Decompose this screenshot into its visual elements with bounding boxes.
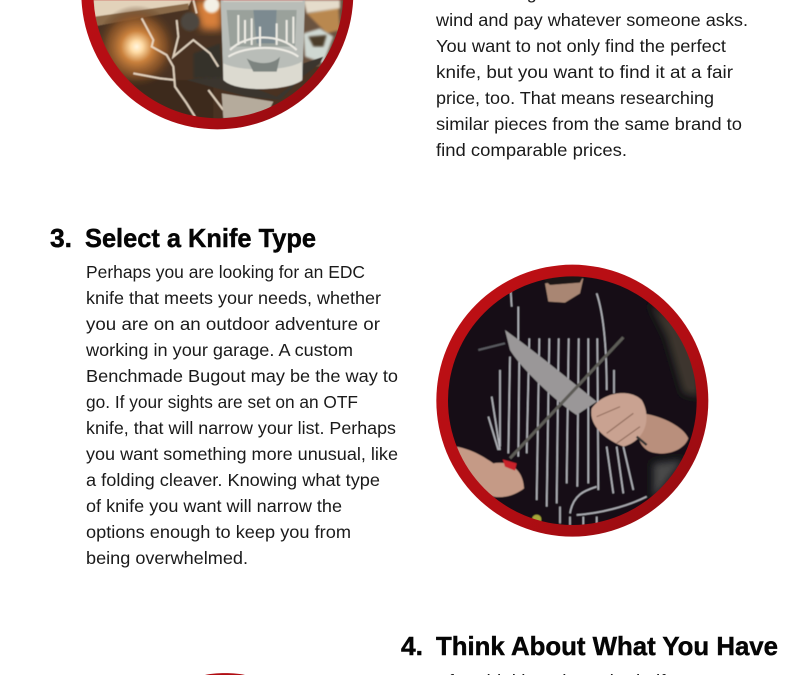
body text: knife type paragraph: Benchmade Bugout may be the way to — [86, 366, 398, 386]
body text: knife type paragraph — [85, 262, 398, 568]
photo: crystal glass in red circle — [80, 0, 357, 133]
heading: 4. Think About What You Have: 4. — [401, 631, 423, 661]
body text: price research paragraph: knife, but you want to find it at a fair — [436, 62, 733, 82]
body text: knife type paragraph: you want something more unusual, like — [86, 444, 398, 464]
body text: price research paragraph: wind and pay whatever someone asks. — [435, 10, 748, 30]
body text: knife type paragraph: go. If your sights are set on an OTF — [86, 392, 358, 412]
body text: price research paragraph: similar pieces from the same brand to — [436, 114, 742, 134]
photo: chef sharpening a knife in red circle — [436, 265, 708, 537]
body text: knife type paragraph: working in your garage. A custom — [85, 340, 353, 360]
photo: red circle top edge, cropped — [205, 673, 245, 675]
body text: knife type paragraph: knife that meets your needs, whether — [86, 288, 381, 308]
body text: knife type paragraph: options enough to keep you from — [86, 522, 351, 542]
body text: knife type paragraph: of knife you want will narrow the — [86, 496, 342, 516]
body text: knife type paragraph: you are on an outdoor adventure or — [86, 314, 380, 334]
heading: 3. Select a Knife Type: 3. — [50, 223, 72, 253]
heading: 3. Select a Knife Type: Select a Knife Type — [85, 223, 316, 253]
body text: knife type paragraph: a folding cleaver. Knowing what type — [86, 470, 380, 490]
body text: price research paragraph: find comparable prices. — [436, 140, 627, 160]
heading: 4. Think About What You Have: Think About What You Have — [436, 631, 778, 661]
body text: knife type paragraph: being overwhelmed. — [86, 548, 248, 568]
body text: knife type paragraph: Perhaps you are looking for an EDC — [86, 262, 365, 282]
body text: price research paragraph: price, too. That means researching — [436, 88, 714, 108]
body text: price research paragraph: You want to not only find the perfect — [436, 36, 726, 56]
body text: knife type paragraph: knife, that will narrow your list. Perhaps — [86, 418, 396, 438]
body text: price research paragraph — [435, 0, 748, 160]
